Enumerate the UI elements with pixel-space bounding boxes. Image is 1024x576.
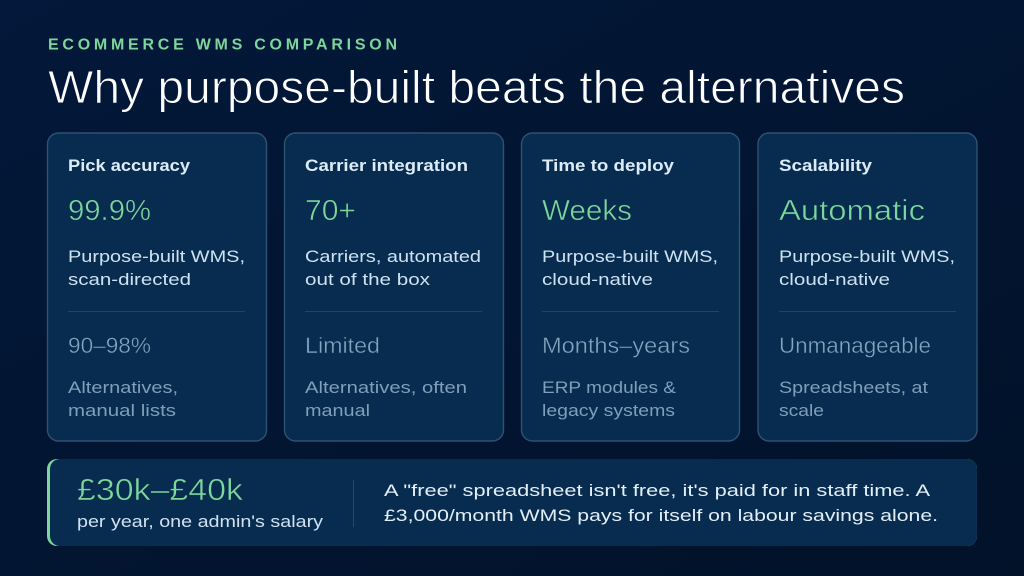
explanation text: A "free" spreadsheet isn't free, it's paid for in staff time. A [384, 481, 931, 500]
alternatives description: Alternatives, [68, 378, 178, 397]
panel: carrier integration [284, 133, 504, 441]
panel: scalability [758, 133, 977, 441]
purpose-built description [779, 247, 955, 289]
metric label: Time to deploy [542, 156, 675, 175]
alternatives description: manual [305, 401, 370, 420]
metric label: Scalability [779, 156, 873, 175]
purpose-built description: cloud-native [779, 270, 890, 289]
explanation text [384, 481, 938, 525]
purpose-built description: out of the box [305, 270, 431, 289]
metric label: Carrier integration [305, 156, 468, 175]
purpose-built description [542, 247, 718, 289]
alternatives value: Unmanageable [779, 333, 931, 358]
alternatives description [779, 378, 928, 420]
alternatives description: scale [779, 401, 824, 420]
eyebrow heading: ECOMMERCE WMS COMPARISON [48, 36, 397, 54]
alternatives description [542, 378, 677, 420]
purpose-built value: Automatic [779, 195, 925, 227]
alternatives description: Spreadsheets, at [779, 378, 928, 397]
purpose-built description: Purpose-built WMS, [779, 247, 955, 266]
title: Why purpose-built beats the alternatives [48, 61, 905, 113]
alternatives description: ERP modules & [542, 378, 677, 397]
purpose-built description: Purpose-built WMS, [68, 247, 245, 266]
panel: pick accuracy [48, 133, 266, 441]
purpose-built value: Weeks [542, 195, 632, 227]
panel: cost callout [47, 459, 977, 546]
alternatives description [305, 378, 467, 420]
alternatives description: Alternatives, often [305, 378, 467, 397]
alternatives description: legacy systems [542, 401, 675, 420]
alternatives value: 90–98% [68, 333, 151, 358]
purpose-built value: 70+ [305, 195, 356, 227]
alternatives value: Limited [305, 333, 380, 358]
purpose-built description: Purpose-built WMS, [542, 247, 718, 266]
purpose-built description: cloud-native [542, 270, 653, 289]
purpose-built description: Carriers, automated [305, 247, 481, 266]
salary caption: per year, one admin's salary [77, 512, 324, 531]
metric label: Pick accuracy [68, 156, 191, 175]
alternatives description: manual lists [68, 401, 176, 420]
alternatives value: Months–years [542, 333, 690, 358]
alternatives description [68, 378, 178, 420]
explanation text: £3,000/month WMS pays for itself on labour savings alone. [384, 506, 938, 525]
purpose-built description [305, 247, 481, 289]
panel: time to deploy [522, 133, 740, 441]
purpose-built value: 99.9% [68, 195, 151, 227]
salary figure: £30k–£40k [77, 472, 244, 507]
purpose-built description [68, 247, 245, 289]
purpose-built description: scan-directed [68, 270, 191, 289]
